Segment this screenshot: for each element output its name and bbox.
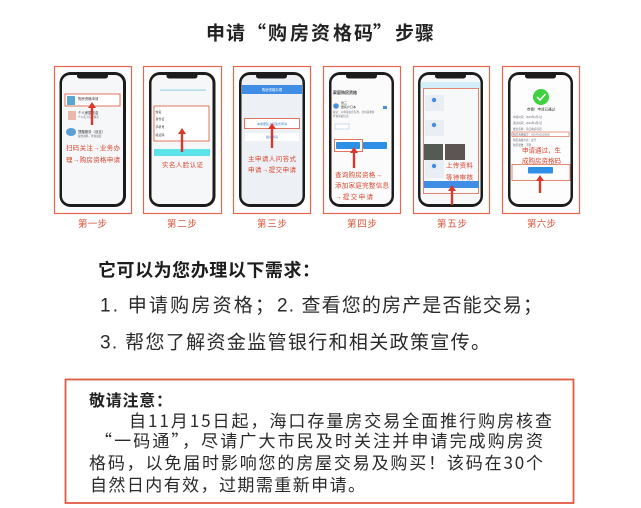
panel: step 6: 购房资格编号：2024010200000 — [513, 132, 550, 136]
panel: step 5: 上传资料 — [446, 160, 474, 170]
panel: step 5 — [414, 66, 490, 214]
notice text: “一码通”，尽请广大市民及时关注并申请完成购房资 — [95, 427, 543, 452]
panel: step 3: 主申请人问答式 — [248, 154, 296, 163]
step 4 caption: 第四步 — [347, 218, 377, 230]
step 6 caption: 第六步 — [527, 218, 556, 230]
panel: step 2: 姓名 — [156, 109, 162, 114]
panel: step 6 — [502, 66, 580, 214]
panel: step 1: 个人名下房屋情况 — [78, 115, 99, 119]
step 3 caption: 第三步 — [257, 218, 287, 230]
panel: step 2: 实名人脸认证 — [162, 160, 204, 169]
panel: step 6: 申请时间：2024年1月2日 — [513, 115, 543, 119]
panel: step 6: 成购房资格码 — [522, 156, 562, 165]
panel: step 3: 提交申请 — [266, 134, 278, 139]
panel: step 6: 通过时间：2024年1月2日 — [513, 121, 543, 125]
panel: step 4: 查询家庭信息 — [333, 114, 349, 118]
step 5 caption: 第五步 — [437, 218, 467, 230]
panel: step 4: 居民户口本 — [341, 104, 356, 109]
panel: step 4: 提示：以申请信息为准，过时请重新 — [333, 110, 375, 114]
panel: step 1 — [54, 66, 132, 214]
panel: step 2: 身份证 — [156, 116, 165, 121]
panel: step 6: 申请通过，生 — [522, 146, 562, 154]
panel: step 4: 查询购房资格→ — [335, 170, 382, 179]
notice text: 自然日内有效，过期需重新申请。 — [90, 471, 365, 496]
panel: step 1: 理→购房资格申请 — [66, 155, 120, 164]
service items 2: 2. 查看您的房产是否能交易； — [277, 294, 542, 316]
panel: step 3: 购房资格办理 — [262, 87, 283, 92]
panel: step 1: 扫码关注→业务办 — [66, 143, 120, 152]
panel: step 4: 张三 — [341, 100, 347, 105]
panel: step 4: 添加家庭完整信息 — [335, 180, 390, 190]
panel: step 2 — [144, 66, 222, 214]
step 1 caption: 第一步 — [78, 218, 107, 230]
panel: step 3: 本地居民人问答式申请 — [257, 121, 287, 126]
service items 1: 1. 申请购房资格； — [100, 294, 274, 316]
panel: step 2: 手机号 — [156, 124, 165, 129]
notice box — [66, 380, 574, 503]
notice text — [89, 407, 552, 496]
panel: step 3: 申请→提交申请 — [248, 165, 296, 174]
panel: step 3 — [234, 66, 310, 214]
service item 3: 3. 帮您了解资金监管银行和相关政策宣传。 — [100, 332, 490, 354]
step 2 caption: 第二步 — [167, 218, 197, 230]
panel: step 1: 购房资格申请 — [78, 96, 99, 101]
panel: step 4 — [324, 66, 400, 214]
panel: step 6: 楼盘名称：海口购房项目 — [513, 127, 542, 131]
notice text: 自11月15日起，海口存量房交易全面推行购房核查 — [129, 407, 552, 432]
panel: step 1: 提醒服务（设定） — [78, 129, 105, 134]
heading: services: 它可以为您办理以下需求： — [98, 256, 320, 282]
title: 申请“购房资格码”步骤 — [206, 18, 434, 46]
panel: step 4: 家庭购房资格 — [333, 89, 357, 95]
panel: step 1: 提交资料，查询进度 — [78, 134, 102, 138]
panel: step 6: 购买资格方式：摇号 — [513, 138, 537, 142]
notice heading: 敬请注意： — [89, 387, 172, 411]
panel: step 2: 验证码 — [156, 132, 165, 137]
panel: step 5: 等待审核 — [446, 172, 474, 182]
panel: step 1: 个人房屋信息 — [78, 110, 99, 115]
panel: step 6: 恭喜！申请已通过 — [527, 106, 555, 112]
panel: step 6: 购买套数：不限 — [513, 143, 532, 147]
notice text: 格码，以免届时影响您的房屋交易及购买！该码在30个 — [89, 449, 543, 474]
panel: step 4: →提交申请 — [335, 192, 374, 201]
